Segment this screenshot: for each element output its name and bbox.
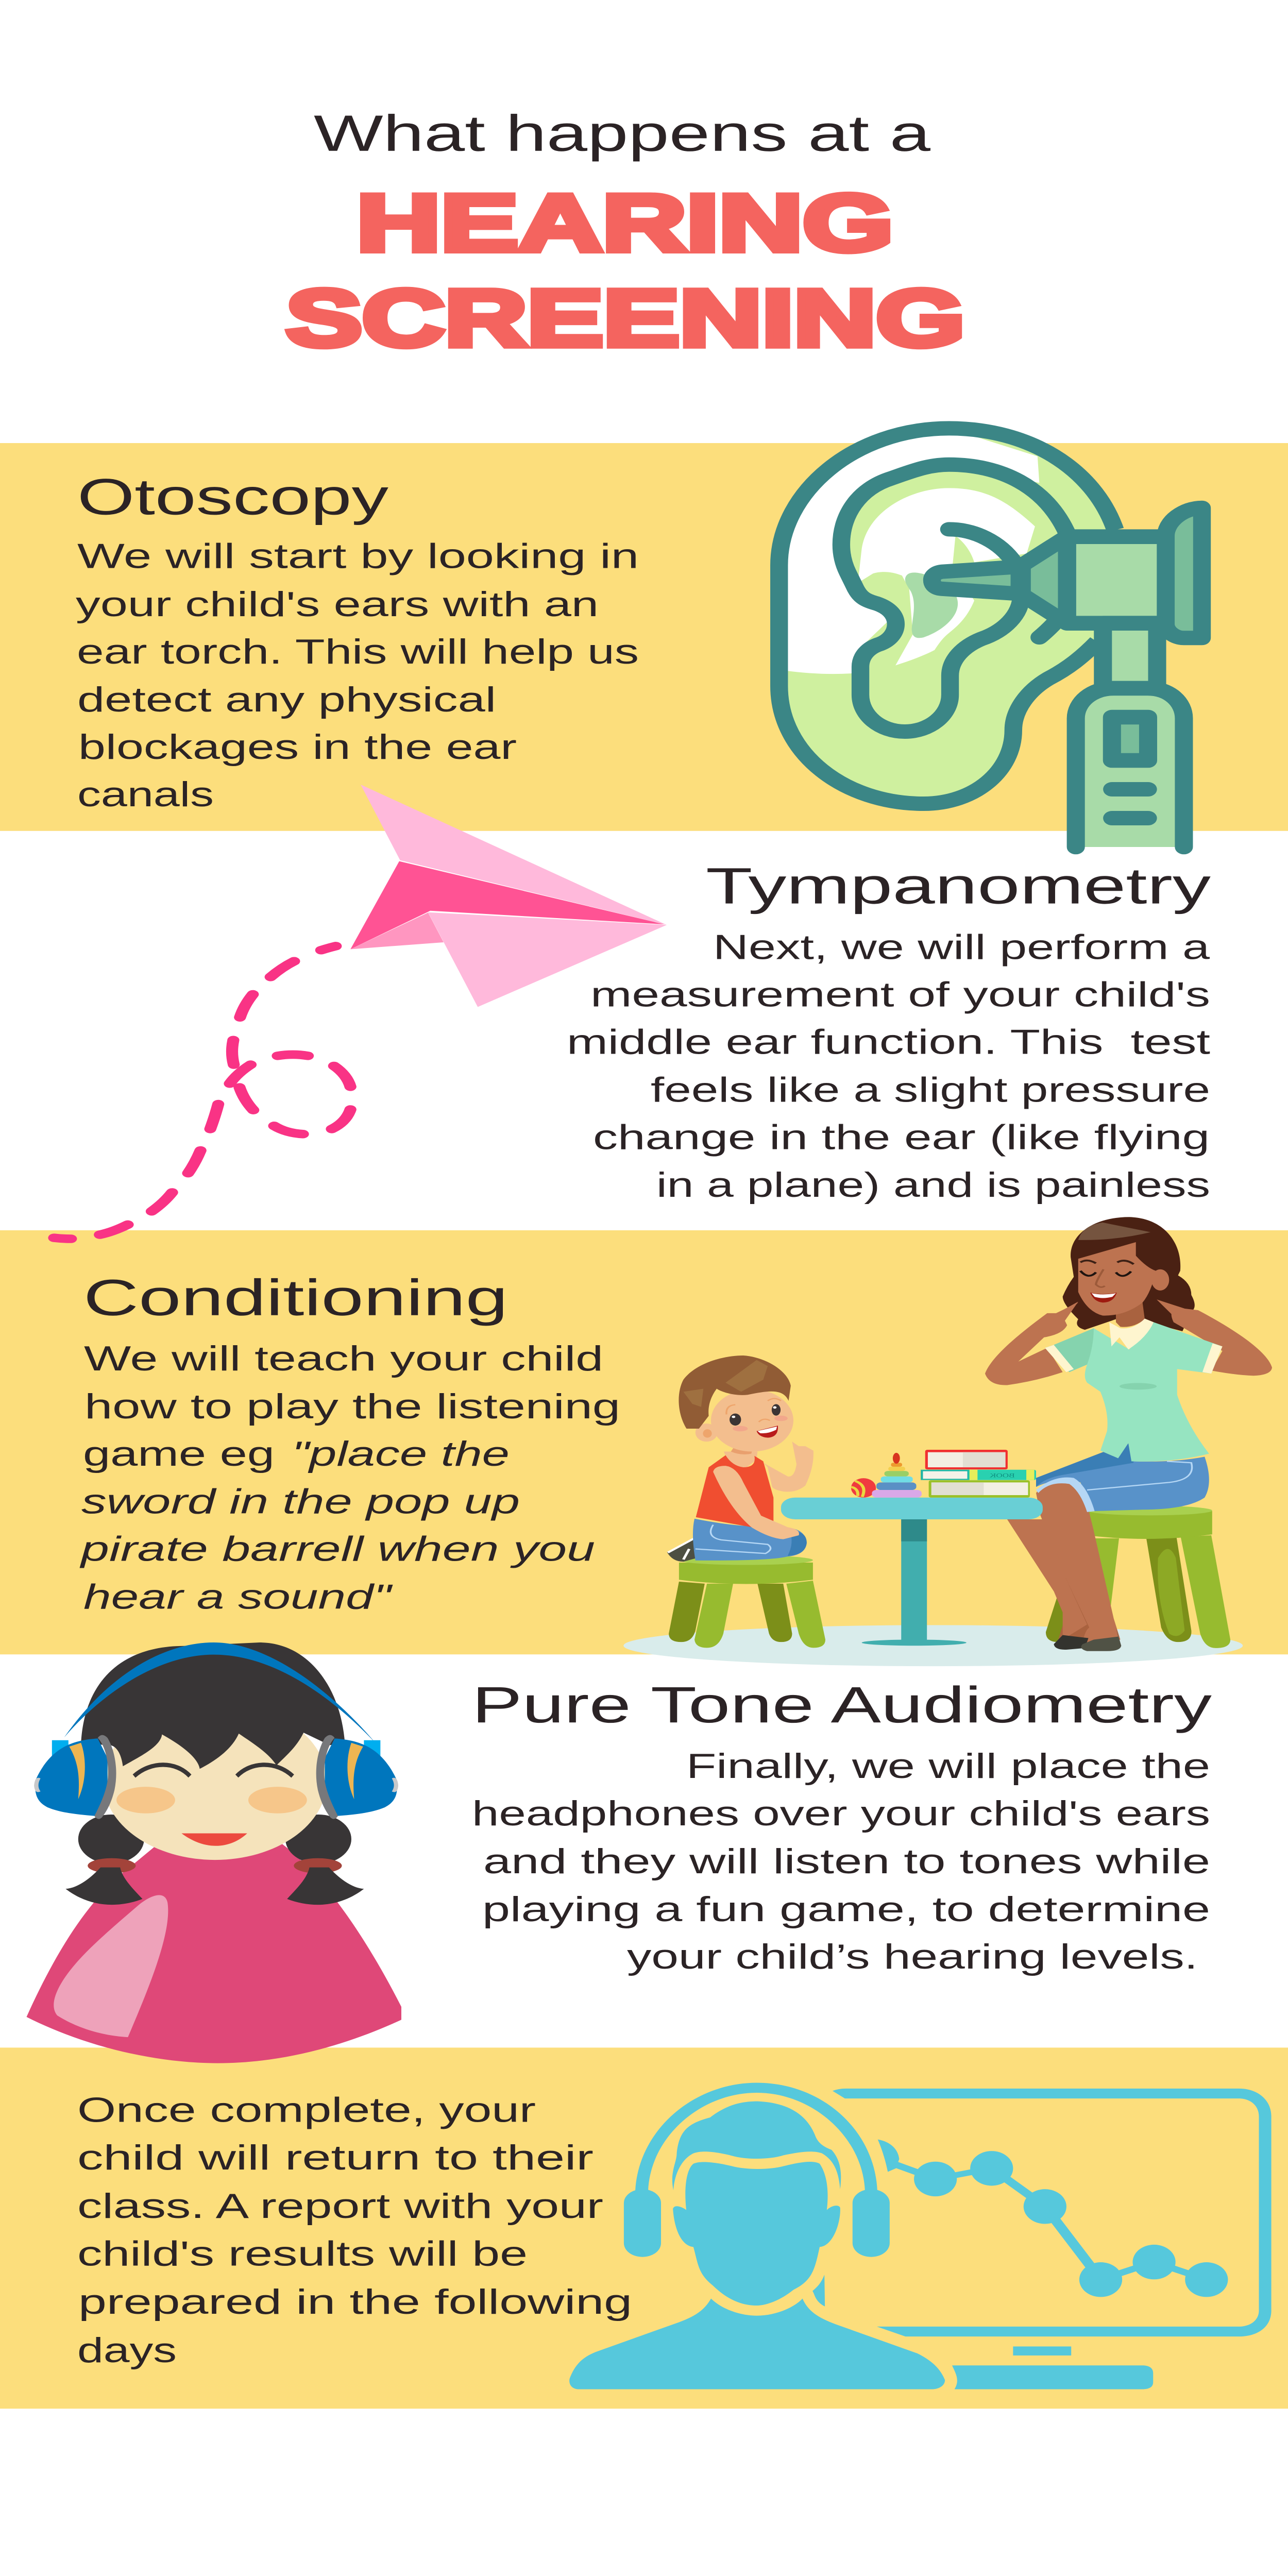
text block: pure tone description: and they will listen to tones while [483,1842,1210,1881]
panel: conditioning band [0,1230,1288,1654]
dress [26,1843,401,2063]
text block: tympanometry description: middle ear function. This test [567,1023,1210,1062]
monitor frame [833,2089,1272,2336]
headset [635,2083,877,2190]
ear canal shade [905,572,958,638]
text block: conditioning description: how to play the listening [84,1387,620,1426]
text block: results description: class. A report with your [77,2187,603,2226]
face [711,1389,793,1452]
icon: person with headset and audiogram monitor [569,2083,1272,2389]
text block: otoscopy description: detect any physical [77,680,496,719]
otoscope handle [1076,688,1184,847]
text block: otoscopy description: ear torch. This will help us [77,632,639,671]
floor shadow [623,1625,1243,1666]
chest skin [724,1452,757,1470]
text block: otoscopy description [76,536,639,814]
mouth [181,1833,247,1846]
teacher arms and shirt [985,1299,1272,1462]
monitor stand [1013,2346,1071,2355]
shoe [667,1536,697,1562]
otoscope head [1067,537,1166,623]
teacher head [1056,1223,1184,1320]
text block: tympanometry description: Next, we will perform a [713,928,1210,967]
text block: results description: child will return to their [77,2138,594,2177]
shoulders [569,2299,945,2389]
otoscope neck [1103,623,1157,688]
handle button [1112,717,1148,760]
text block: conditioning description: game eg [83,1434,275,1473]
ear white highlight [779,428,1039,674]
dashed trail [54,946,350,1239]
illustration: girl with headphones [26,1642,401,2063]
otoscope eyepiece [1166,508,1202,638]
ear outlines [779,428,1115,804]
text block: pure tone description: headphones over your child's ears [472,1794,1210,1833]
text block: pure tone description: playing a fun game, to determine [482,1890,1210,1929]
neck [731,1448,753,1454]
text block: tympanometry description: feels like a slight pressure [651,1070,1210,1109]
teacher skirt [1036,1443,1209,1512]
pigtails [65,1868,142,1905]
head hair [672,2102,841,2190]
text block: otoscopy description: your child's ears with an [76,585,599,624]
text block: tympanometry description: measurement of your child's [590,975,1210,1014]
panel: results band [0,2047,1288,2409]
hair top [81,1642,345,1769]
right headphone [316,1735,398,1819]
text block: results description [77,2090,632,2370]
text block: results description: Once complete, your [77,2090,536,2129]
ear outer fill [779,428,1115,804]
heading: Otoscopy: Otoscopy [77,468,388,526]
text block: pure tone description: Finally, we will place the [686,1747,1210,1786]
teacher legs [1007,1480,1121,1651]
ear [696,1423,718,1442]
icon: ear with otoscope [779,428,1202,847]
raised arm [763,1442,814,1492]
book stack: BOOK [989,1472,1015,1479]
left headphone [34,1735,116,1819]
resting arm [713,1466,799,1539]
face [104,1703,327,1860]
text block: tympanometry description: change in the ear (like flying [593,1117,1210,1157]
text block: conditioning description: "place the [292,1434,510,1473]
text block: conditioning description: sword in the pop up [81,1482,520,1521]
title: HEARING [357,178,893,268]
text block: otoscopy description: canals [77,775,214,814]
heading: Tympanometry: Tympanometry [706,857,1211,914]
book stack [921,1450,1036,1498]
top [696,1455,773,1527]
title [286,105,965,363]
eyes and cheeks [730,1414,741,1426]
text block: results description: days [77,2331,177,2370]
otoscope tip [932,567,1020,594]
dress highlight [54,1895,168,2037]
plane body [361,785,667,925]
pointing fingers [1056,1299,1184,1320]
panel: otoscopy band [0,443,1288,831]
illustration: teacher and child at table [623,1217,1272,1666]
text block: tympanometry description: in a plane) and is painless [656,1165,1210,1205]
teacher stool [1046,1506,1230,1648]
shoes [1054,1635,1089,1650]
hair buns [78,1815,144,1863]
eyes [134,1765,293,1776]
text block: conditioning description: We will teach your child [84,1339,603,1378]
text block: conditioning description: hear a sound" [83,1577,394,1616]
text block: pure tone description: your child’s hearing levels. [627,1937,1198,1976]
otoscope cone [1022,537,1067,623]
text block: otoscopy description: We will start by looking in [77,536,639,575]
heading: Pure Tone Audiometry: Pure Tone Audiometry [472,1676,1212,1733]
cheeks [116,1787,175,1814]
inner ear white [858,488,1035,665]
mouth [757,1426,778,1438]
toy ball and ring stack [851,1453,922,1498]
text block: pure tone description [472,1747,1210,1976]
heading: Conditioning: Conditioning [83,1269,508,1326]
child [667,1355,814,1562]
pants [693,1519,807,1561]
text block: otoscopy description: blockages in the ear [78,727,517,767]
icon: paper airplane with dashed trail [54,785,667,1239]
inner ear fill [841,465,1068,732]
hair [679,1355,791,1429]
title: What happens at a [314,105,931,162]
audiogram line chart [878,2140,1228,2297]
text block: conditioning description: pirate barrell when you [79,1530,595,1569]
text block: results description: child's results will be [77,2234,528,2274]
title: SCREENING [286,274,965,363]
text block: conditioning description [79,1339,620,1616]
text block: results description: prepared in the following [78,2282,632,2321]
child stool [669,1555,825,1648]
headband [64,1642,376,1743]
face [673,2162,840,2306]
table [781,1498,1043,1646]
teacher hair back [1063,1217,1195,1331]
text block: tympanometry description [567,928,1210,1205]
hair ties [88,1858,135,1873]
